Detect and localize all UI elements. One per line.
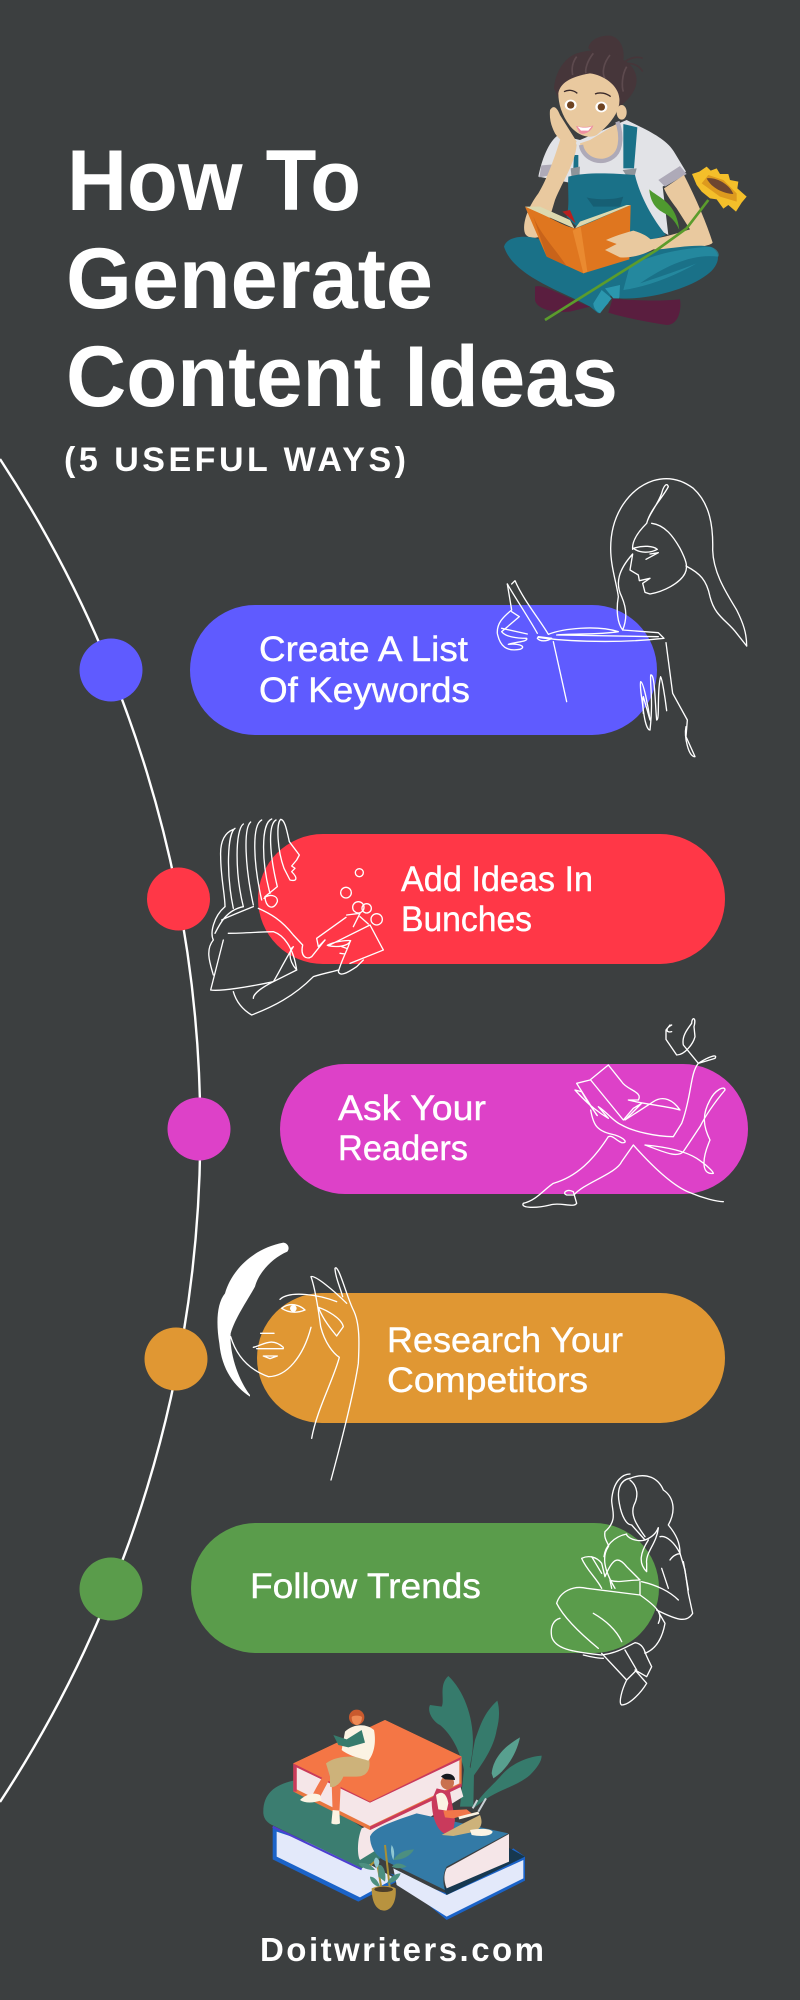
step 4 label: [387, 1321, 623, 1400]
right blue book: [370, 1813, 525, 1920]
step 5 marker: [80, 1558, 142, 1620]
step 5 label: Follow Trends: [250, 1567, 481, 1606]
step 3 label: [338, 1089, 486, 1168]
shoes: [535, 286, 590, 312]
website footer: Doitwriters.com: [260, 1931, 544, 1968]
hair shape: [217, 1243, 289, 1397]
step 1: [80, 479, 747, 757]
step 3 label: Ask Your: [338, 1089, 486, 1128]
right arm: [640, 175, 713, 249]
timeline curve: [0, 459, 200, 1802]
neck and collar: [580, 123, 620, 161]
book: [525, 205, 631, 273]
step 5: [80, 1474, 693, 1705]
title: How To: [67, 133, 361, 229]
step 2 label: Add Ideas In: [401, 860, 593, 899]
line art: woman reading: [497, 479, 747, 757]
step 2 label: Bunches: [401, 900, 532, 939]
step 2 pill: [258, 834, 725, 964]
reading woman: [300, 1710, 375, 1824]
step 2 marker: [147, 868, 210, 930]
step 1 label: Create A List: [259, 630, 468, 669]
top orange book: [293, 1720, 462, 1830]
step 4 marker: [144, 1328, 208, 1390]
hand: [605, 231, 654, 258]
step 3 pill: [280, 1064, 748, 1194]
sunflower: [692, 167, 747, 212]
step 3 label: Readers: [338, 1129, 468, 1168]
title: Content Ideas: [66, 329, 618, 425]
line art: woman's face with hand: [217, 1243, 359, 1480]
legs: [504, 237, 718, 313]
step 4: [144, 1243, 725, 1480]
illustration: people on stacked books: [263, 1676, 542, 1920]
hair bun and hair: [588, 36, 624, 62]
step 2 label: [401, 860, 593, 939]
step 3 marker: [168, 1098, 230, 1160]
lower blue book: [263, 1781, 463, 1902]
step 2: [147, 819, 725, 1015]
step 3: [168, 1019, 748, 1207]
face: [558, 73, 619, 137]
step 5 pill: [191, 1523, 659, 1653]
line art: woman sitting and reading: [551, 1474, 693, 1705]
step 1 label: Of Keywords: [259, 671, 470, 710]
step 4 label: Research Your: [387, 1321, 623, 1360]
title: Generate: [66, 231, 433, 327]
plant leaves: [429, 1676, 542, 1808]
step 1 label: [259, 630, 470, 710]
title: [66, 133, 618, 425]
step 1 marker: [80, 638, 142, 702]
stem and leaf: [545, 200, 708, 320]
raised arm: [524, 135, 577, 238]
line art: woman holding book with flowers: [209, 819, 383, 1015]
subtitle: (5 USEFUL WAYS): [64, 441, 406, 479]
line art: person reading on knees: [523, 1019, 725, 1207]
shirt: [538, 120, 686, 235]
overalls: [623, 124, 637, 168]
illustration: girl reading with sunflower: [504, 36, 747, 325]
potted plant: [358, 1845, 414, 1911]
step 1 pill: [190, 605, 657, 735]
step 4 label: Competitors: [387, 1361, 588, 1400]
man with laptop: [432, 1774, 493, 1836]
step 4 pill: [257, 1293, 725, 1423]
